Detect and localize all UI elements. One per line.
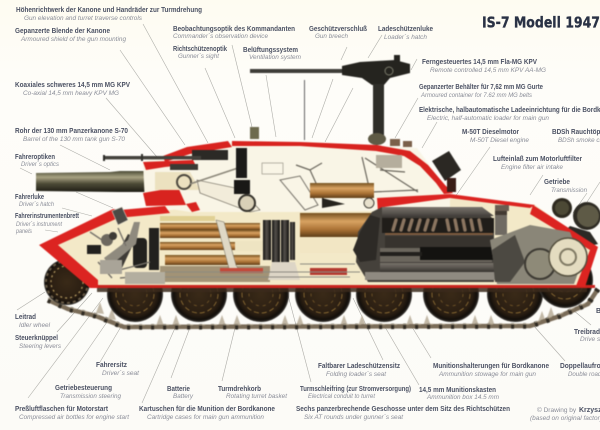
callout labels, bottom: Steuerknüppel (15, 335, 58, 342)
callout labels, right: M-50T Diesel engine (470, 137, 529, 144)
callout labels, upper left: Fahreroptiken (15, 154, 55, 161)
callout labels, bottom: Kartuschen für die Munition der Bordkanone (139, 406, 275, 413)
callout labels, bottom: Ammunition box 14.5 mm (426, 394, 500, 401)
callout labels, bottom: Batterie (167, 386, 190, 393)
callout labels, top centre: Ladeschützenluke (378, 26, 433, 33)
callout labels, right: Getriebe (544, 179, 570, 186)
smoke dischargers (552, 198, 600, 246)
callout labels, bottom: Getriebesteuerung (55, 385, 112, 392)
track (48, 289, 598, 327)
callout labels, upper left: Driver´s optics (21, 161, 60, 168)
callout labels, bottom (15, 314, 600, 421)
tank cutaway drawing (36, 55, 600, 327)
loader mechanism (296, 155, 418, 205)
callout labels, top centre: Ventilation system (249, 54, 302, 61)
turret interior (143, 142, 450, 212)
track teeth (96, 302, 555, 326)
antenna (304, 80, 305, 140)
callout labels, top centre: Belüftungssystem (243, 47, 298, 54)
callout labels, upper left: Fahrerluke (15, 194, 44, 201)
callout labels, right: Engine filter air intake (501, 164, 563, 171)
callout labels, upper left: Co-axial 14,5 mm heavy KPV MG (23, 90, 119, 97)
callout labels, bottom: Munitionshalterungen für Bordkanone (433, 363, 549, 370)
drawing credit (530, 406, 600, 422)
callout labels, bottom: Cartridge cases for main gun ammunition (147, 414, 264, 421)
callout labels, upper left: Armoured shield of the gun mounting (20, 36, 126, 43)
callout labels, bottom: Transmission steering (60, 393, 121, 400)
callout labels, bottom: Electrical conduit to turret (308, 393, 376, 400)
callout labels, upper left: Driver´s hatch (19, 201, 54, 208)
callout labels, bottom: Fahrersitz (96, 362, 127, 369)
callout labels, bottom: Sechs panzerbrechende Geschosse unter dem Sitz des Richtschützen (296, 406, 510, 413)
callout labels, bottom: Folding loader´s seat (326, 371, 387, 378)
callout labels, bottom: Driver´s seat (102, 370, 140, 377)
main gun barrel (36, 171, 157, 192)
engine (353, 205, 509, 282)
callout labels, bottom: Battery (173, 393, 194, 400)
callout labels, upper left: Fahrerinstrumentenbrett (15, 213, 80, 220)
turret and gun mantlet armour (143, 141, 453, 212)
cream gun cradle (155, 148, 318, 212)
callout labels, top centre: Gunner´s sight (178, 53, 220, 60)
callout labels, bottom: Faltbarer Ladeschützensitz (318, 363, 400, 370)
callout labels, top centre: Commander´s observation device (173, 33, 268, 40)
callout labels, bottom: Ammunition stowage for main gun (438, 371, 536, 378)
callout labels, right: Lufteinlaß zum Motorluftfilter (493, 156, 582, 163)
cartridge cases (160, 213, 372, 282)
callout labels, bottom: Idler wheel (19, 322, 51, 329)
hull interior (58, 195, 595, 286)
ammunition container (432, 151, 461, 192)
callout labels, top centre: Beobachtungsoptik des Kommandanten (173, 26, 295, 33)
compressed air bottles and driver controls (87, 216, 215, 284)
hull floor underside (97, 288, 587, 292)
callout labels, upper left: panels (15, 228, 33, 235)
callout labels, upper left: Barrel of the 130 mm tank gun S-70 (23, 136, 125, 143)
callout labels, bottom: Compressed air bottles for engine start (19, 414, 130, 421)
callout labels, right: Transmission (551, 187, 587, 194)
callout labels, bottom: Turmdrehkorb (218, 386, 261, 393)
callout labels, bottom: Leitrad (15, 314, 36, 321)
callout labels, right: Gepanzerter Behälter für 7,62 mm MG Gurte (419, 84, 543, 91)
callout labels, top centre: Gun breech (315, 33, 348, 40)
callout labels, upper left (15, 7, 202, 235)
callout labels, upper left: Gepanzerte Blende der Kanone (15, 28, 110, 35)
callout labels, bottom: Preßluftflaschen für Motorstart (15, 406, 109, 413)
AA machine gun (250, 55, 410, 145)
callout labels, top centre: Richtschützenoptik (173, 46, 227, 53)
callout labels, right (419, 59, 600, 343)
driver hatch (112, 207, 128, 225)
idler wheel (44, 259, 90, 305)
callout labels, upper left: Koaxiales schweres 14,5 mm MG KPV (15, 82, 130, 89)
commander sight (250, 127, 259, 139)
floor rails (165, 264, 360, 277)
callout labels, right: M-50T Dieselmotor (462, 129, 519, 136)
callout labels, upper left: Rohr der 130 mm Panzerkanone S-70 (15, 128, 128, 135)
callout labels, bottom: Steering levers (19, 343, 62, 350)
callout labels, upper left: Driver´s instrument (16, 221, 63, 228)
callout labels, right: Ferngesteuertes 14,5 mm Fla-MG KPV (422, 59, 537, 66)
callout labels, top centre: Geschützverschluß (309, 26, 368, 33)
callout labels, bottom: Turmschleifring (zur Stromversorgung) (300, 386, 411, 393)
transmission (490, 225, 587, 284)
callout labels, right: Armoured container for 7.62 mm MG belts (420, 92, 533, 99)
coaxial machine gun (103, 154, 201, 161)
callout labels, top centre (173, 26, 433, 61)
callout labels, upper left: Höhenrichtwerk der Kanone und Handräder zur Turmdrehung (16, 7, 202, 14)
callout labels, upper left: Gun elevation and turret traverse controls (24, 15, 143, 22)
callout labels, top centre: Loader´s hatch (384, 34, 427, 41)
main gun breech (310, 183, 374, 208)
hull armour (39, 194, 598, 288)
callout labels, bottom: Rotating turret basket (226, 393, 288, 400)
callout labels, bottom: Six AT rounds under gunner´s seat (304, 414, 404, 421)
callout labels, right: Electric, half-automatic loader for main gun (427, 115, 549, 122)
callout labels, right: Remote controlled 14,5 mm KPV AA-MG (430, 67, 546, 74)
callout labels, bottom: 14,5 mm Munitionskasten (419, 387, 496, 394)
drawing credit: © Drawing by (537, 406, 577, 414)
shells under gunner (263, 220, 300, 280)
hatches on turret roof (390, 139, 412, 147)
road wheels (107, 252, 593, 322)
